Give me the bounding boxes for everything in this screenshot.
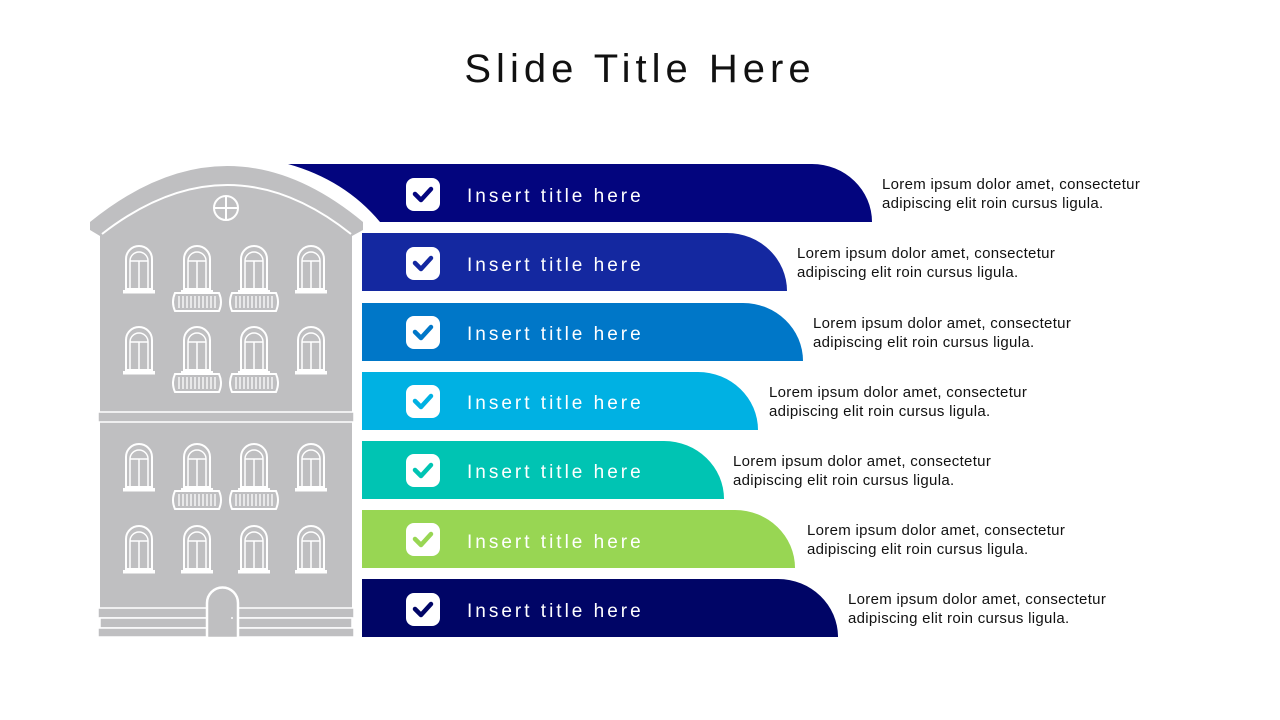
- descriptions: Lorem ipsum dolor amet, consectetur: [733, 453, 991, 470]
- descriptions: adipiscing elit roin cursus ligula.: [882, 195, 1103, 212]
- building: [90, 166, 363, 638]
- bar 2: Insert title here: [467, 255, 644, 276]
- descriptions: Lorem ipsum dolor amet, consectetur: [807, 522, 1065, 539]
- descriptions: [733, 176, 1140, 627]
- descriptions: adipiscing elit roin cursus ligula.: [769, 403, 990, 420]
- bar 5: Insert title here: [467, 462, 644, 483]
- bar 6: Insert title here: [467, 532, 644, 553]
- bar 4: Insert title here: [467, 393, 644, 414]
- descriptions: adipiscing elit roin cursus ligula.: [813, 334, 1034, 351]
- steps: [98, 608, 354, 637]
- bar title 1: Insert title here: [467, 186, 644, 207]
- bar 3: [362, 303, 803, 361]
- icon: round window: [214, 196, 238, 220]
- descriptions: Lorem ipsum dolor amet, consectetur: [813, 315, 1071, 332]
- bar 6: [362, 510, 795, 568]
- title: Slide Title Here: [464, 47, 816, 91]
- bar 3: Insert title here: [467, 324, 644, 345]
- descriptions: adipiscing elit roin cursus ligula.: [807, 541, 1028, 558]
- bar 5: [362, 441, 724, 499]
- bar 7: [362, 579, 838, 637]
- floor divider: [98, 412, 354, 422]
- descriptions: adipiscing elit roin cursus ligula.: [733, 472, 954, 489]
- bar 7: Insert title here: [467, 601, 644, 622]
- windows: [123, 246, 327, 574]
- bar 1: [288, 164, 872, 222]
- descriptions: Lorem ipsum dolor amet, consectetur: [882, 176, 1140, 193]
- bar 4: [362, 372, 758, 430]
- descriptions: adipiscing elit roin cursus ligula.: [848, 610, 1069, 627]
- descriptions: adipiscing elit roin cursus ligula.: [797, 264, 1018, 281]
- descriptions: Lorem ipsum dolor amet, consectetur: [769, 384, 1027, 401]
- bar 2: [362, 233, 787, 291]
- door: [207, 588, 238, 638]
- icon: check 1: [406, 178, 440, 211]
- descriptions: Lorem ipsum dolor amet, consectetur: [797, 245, 1055, 262]
- descriptions: Lorem ipsum dolor amet, consectetur: [848, 591, 1106, 608]
